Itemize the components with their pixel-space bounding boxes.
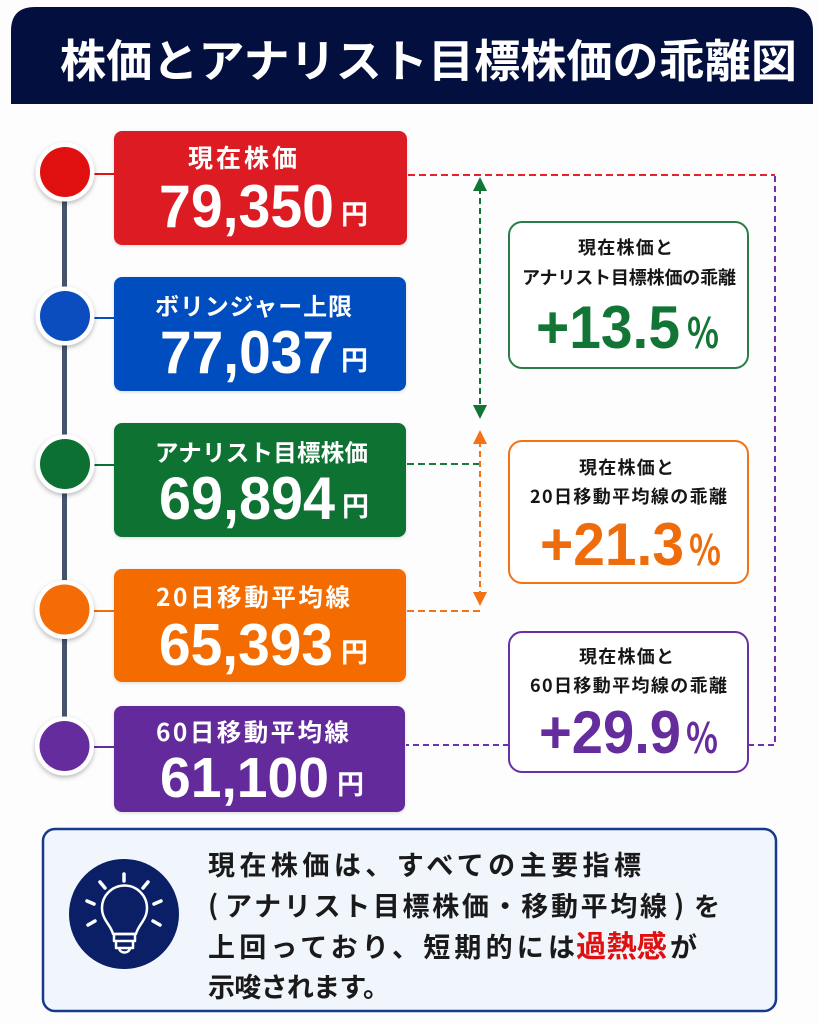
panel: analyst target: 円 xyxy=(342,485,369,524)
callout: analyst gap: % xyxy=(687,300,719,361)
panel: bollinger upper: ボリンジャー上限 xyxy=(155,287,352,322)
summary text xyxy=(208,844,720,1005)
connector: orange dashed line xyxy=(407,610,482,612)
callout: analyst gap xyxy=(509,222,748,368)
summary text: 現在株価は、すべての主要指標 xyxy=(208,844,641,883)
panel: current price: 79,350 xyxy=(159,173,334,240)
summary text: 過熱感 xyxy=(576,922,667,966)
panel: current price: 円 xyxy=(341,193,368,232)
summary text: が xyxy=(670,926,697,965)
callout: analyst gap: 現在株価と xyxy=(578,234,673,260)
callout: 20-day gap xyxy=(509,441,748,583)
icon: light bulb xyxy=(69,859,179,969)
connector: green dashed line xyxy=(407,463,480,465)
panel: 60-day moving average: 60日移動平均線 xyxy=(156,714,350,749)
callout: 20-day gap: +21.3 xyxy=(540,511,684,578)
panel: current price: 現在株価 xyxy=(188,139,297,175)
panel: 60-day moving average: 61,100 xyxy=(160,746,329,810)
summary text: ( xyxy=(208,884,218,923)
summary text: 上回っており、短期的には xyxy=(208,926,575,965)
panel: summary note xyxy=(43,829,776,1011)
panel: analyst target: 69,894 xyxy=(159,465,336,532)
callout: 60-day gap: 現在株価と xyxy=(579,643,674,669)
panel: 20-day moving average: 20日移動平均線 xyxy=(156,579,350,614)
callout: 60-day gap xyxy=(509,632,748,772)
timeline node: purple xyxy=(35,716,114,776)
summary text: アナリスト目標株価・移動平均線 xyxy=(225,885,667,924)
callout: 60-day gap: % xyxy=(686,705,718,766)
callout: analyst gap: +13.5 xyxy=(536,294,680,361)
panel: 60-day moving average xyxy=(114,706,405,812)
summary text: を xyxy=(694,887,720,924)
panel: 20-day moving average xyxy=(114,569,406,682)
panel: analyst target: アナリスト目標株価 xyxy=(155,434,368,468)
callout: 60-day gap: 60日移動平均線の乖離 xyxy=(530,672,727,698)
summary text: 示唆されます。 xyxy=(208,966,390,1005)
title banner xyxy=(11,7,813,104)
callout: 60-day gap: +29.9 xyxy=(539,699,681,766)
callout: analyst gap: アナリスト目標株価の乖離 xyxy=(522,264,736,290)
timeline node: orange xyxy=(35,580,114,639)
timeline spine xyxy=(62,172,67,746)
callout: 20-day gap: 20日移動平均線の乖離 xyxy=(530,483,727,509)
timeline node: blue xyxy=(36,286,114,346)
connector: red dashed line to top right xyxy=(408,174,775,176)
callout: 20-day gap: 現在株価と xyxy=(579,454,674,480)
panel: bollinger upper: 円 xyxy=(341,339,368,378)
timeline node: green xyxy=(36,434,114,494)
summary text: ) xyxy=(674,884,684,923)
connector: purple dashed frame xyxy=(406,176,775,745)
panel: 60-day moving average: 円 xyxy=(337,763,364,802)
callout: 20-day gap: % xyxy=(689,517,721,578)
title text: 株価とアナリスト目標株価の乖離図 xyxy=(60,25,797,90)
arrow: orange double-headed xyxy=(473,430,487,606)
panel: bollinger upper: 77,037 xyxy=(160,319,334,386)
panel: analyst target xyxy=(114,423,406,537)
timeline node: red xyxy=(36,142,114,202)
panel: current price xyxy=(114,131,407,245)
panel: bollinger upper xyxy=(114,277,406,391)
arrow: green double-headed xyxy=(473,177,487,419)
panel: 20-day moving average: 65,393 xyxy=(159,612,333,678)
panel: 20-day moving average: 円 xyxy=(341,631,368,670)
